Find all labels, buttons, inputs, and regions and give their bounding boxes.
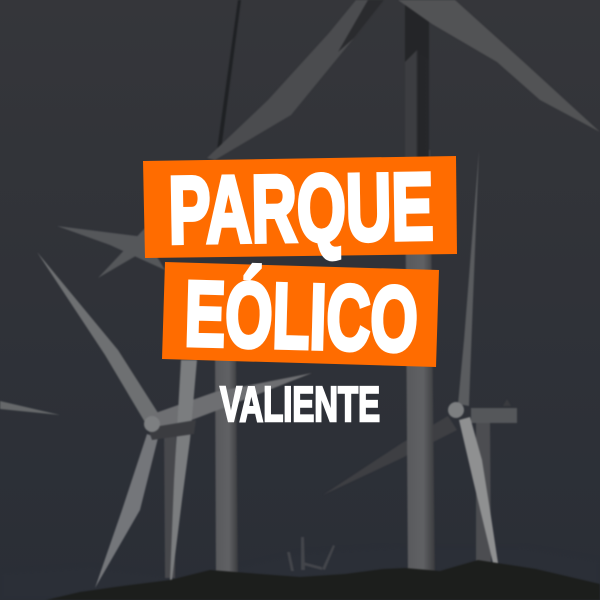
turbine: second tower — [215, 350, 238, 584]
turbine: left rotor — [37, 252, 312, 588]
turbine: left tower — [164, 425, 176, 578]
turbine: right rotor — [323, 150, 498, 563]
turbine: right tower and nacelle — [471, 399, 517, 562]
subtitle: VALIENTE: VALIENTE — [220, 378, 380, 432]
turbine: rear blades behind title — [57, 226, 165, 278]
title: PARQUE — [143, 154, 457, 264]
turbine: main rotor blades — [207, 0, 600, 160]
orange banner: EÓLICO — [162, 262, 439, 367]
heading text: PARQUE: PARQUE — [168, 154, 434, 264]
title: EÓLICO — [162, 262, 439, 371]
turbine: far left blade — [0, 401, 60, 415]
heading text: EÓLICO: EÓLICO — [183, 262, 419, 371]
turbine: thin rear blade — [217, 0, 241, 150]
distant turbines — [287, 537, 335, 571]
orange banner: PARQUE — [143, 156, 457, 258]
foreground hill — [46, 560, 600, 600]
distant hills — [0, 546, 600, 600]
turbine: main tower — [405, 0, 435, 588]
